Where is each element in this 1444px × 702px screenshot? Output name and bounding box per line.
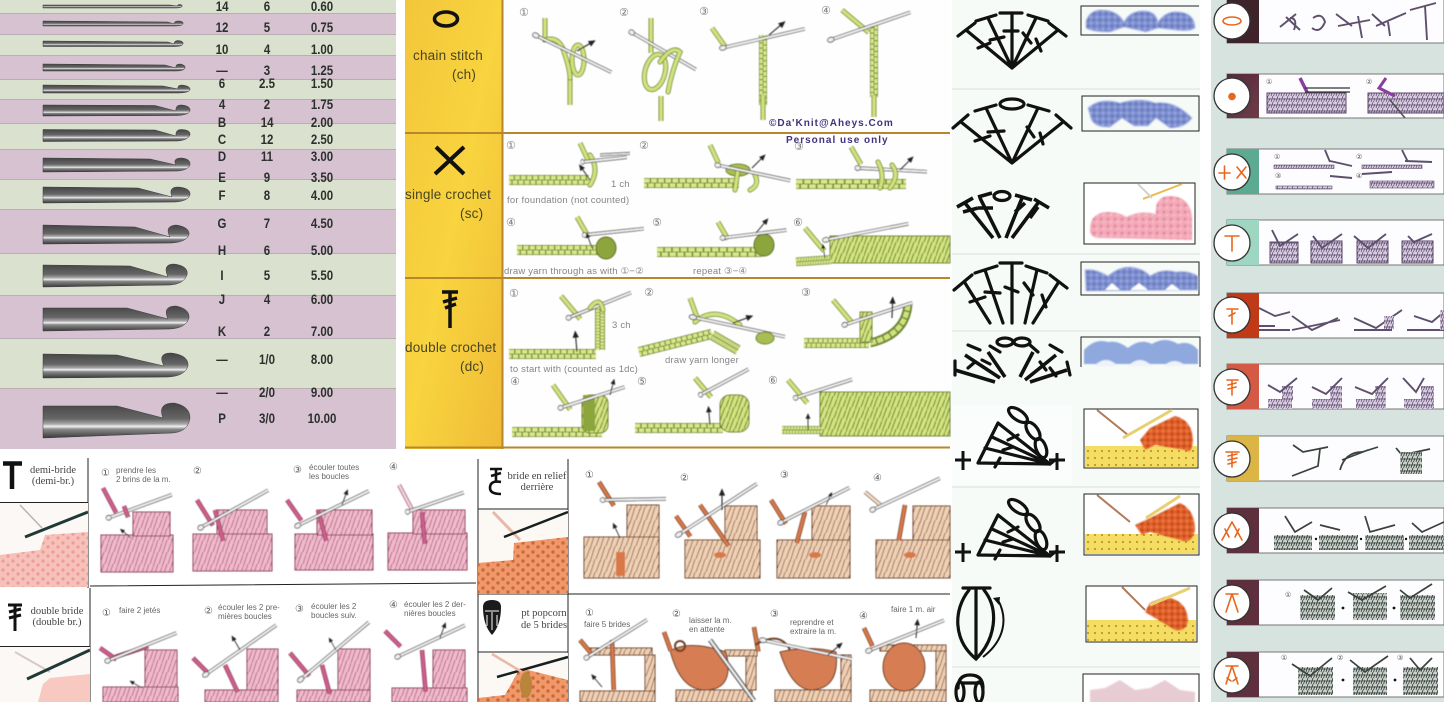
instruction text: ② xyxy=(204,606,213,617)
size table numbers: 12 xyxy=(261,131,273,147)
size table numbers: 1/0 xyxy=(259,351,275,367)
size table numbers: 1.75 xyxy=(311,96,333,112)
size table numbers: H xyxy=(218,242,226,258)
size table numbers: 2.5 xyxy=(259,75,275,91)
swatch: pale pink xyxy=(1083,674,1199,702)
size table numbers: 12 xyxy=(216,19,228,35)
instruction text: faire 2 jetés xyxy=(119,606,160,615)
symbol: fan 3 xyxy=(957,192,1049,238)
size table numbers: 5.00 xyxy=(311,242,333,258)
size table numbers: 3 xyxy=(264,62,270,78)
swatch: blue scallop 1 xyxy=(1081,6,1199,35)
instruction text: ① xyxy=(585,470,594,481)
circled step numbers: ⑥ xyxy=(768,375,778,387)
chain stitch illustrations xyxy=(532,10,911,121)
size table numbers: J xyxy=(219,291,225,307)
single crochet captions: 1 ch xyxy=(611,179,630,190)
size table numbers: 5 xyxy=(264,267,270,283)
strip 5: double crochet xyxy=(1214,293,1444,338)
size table numbers: 2.50 xyxy=(311,131,333,147)
double bride heading: (double br.) xyxy=(32,617,82,628)
size table numbers: 4 xyxy=(219,96,226,112)
watermark xyxy=(769,118,894,146)
circled step numbers: ② xyxy=(644,287,654,299)
circled step numbers: ② xyxy=(639,140,649,152)
double crochet captions: 3 ch xyxy=(612,320,631,331)
strip 2: slip stitch: ② xyxy=(1366,78,1372,86)
instruction text: ④ xyxy=(859,611,868,622)
pink stitch diagrams row 2 xyxy=(100,620,467,702)
single crochet captions: draw yarn through as with ①−② xyxy=(504,266,644,277)
size table numbers: 9.00 xyxy=(311,384,333,400)
instruction text: écouler toutes xyxy=(309,463,359,472)
instruction text: écouler les 2 pre- xyxy=(218,603,280,612)
size table numbers: 3.50 xyxy=(311,169,333,185)
panel: peach stitch instructions xyxy=(476,450,950,702)
photo: peach fabric and hook 1 xyxy=(478,510,568,594)
size table numbers: 10.00 xyxy=(308,410,336,426)
instruction text: laisser la m. xyxy=(689,616,732,625)
single crochet captions: repeat ③−④ xyxy=(693,266,747,277)
size table numbers: 2 xyxy=(264,323,270,339)
swatch: orange 2 xyxy=(1084,494,1199,555)
size table numbers: 6 xyxy=(219,75,225,91)
strip 2: slip stitch: ① xyxy=(1266,78,1272,86)
swatch: orange 1 xyxy=(1084,409,1198,468)
instruction text: extraire la m. xyxy=(790,627,836,636)
instruction text: faire 5 brides xyxy=(584,620,630,629)
instruction text: faire 1 m. air xyxy=(891,605,936,614)
double bride heading xyxy=(31,606,84,628)
demi-bride heading xyxy=(30,465,76,487)
size table numbers: 1.00 xyxy=(311,41,333,57)
instruction text: nières boucles xyxy=(404,609,456,618)
strip 10: cluster variant xyxy=(1214,652,1444,697)
stitch names: (sc) xyxy=(460,206,483,221)
size table numbers: 6.00 xyxy=(311,291,333,307)
watermark: ©Da'Knit@Aheys.Com xyxy=(769,118,894,129)
size table numbers: 14 xyxy=(261,114,274,130)
size table numbers: 7.00 xyxy=(311,323,333,339)
demi-bride heading: demi-bride xyxy=(30,465,76,476)
circled step numbers: ① xyxy=(506,140,516,152)
circled step numbers: ④ xyxy=(506,217,516,229)
size table numbers: 5 xyxy=(264,19,270,35)
icon: chain symbol xyxy=(434,12,458,26)
instruction text: ② xyxy=(193,466,202,477)
instruction text: ① xyxy=(585,608,594,619)
double bride heading: double bride xyxy=(31,606,84,617)
popcorn heading: pt popcorn xyxy=(521,608,567,619)
size table numbers: — xyxy=(216,384,228,400)
size table numbers: 2/0 xyxy=(259,384,275,400)
symbol: fan 5 xyxy=(955,338,1070,382)
size table numbers: 7 xyxy=(264,215,270,231)
instruction text: ③ xyxy=(293,465,302,476)
strip 8: decrease xyxy=(1214,508,1444,553)
stitch names xyxy=(405,48,496,374)
panel: stitch symbol charts and swatches xyxy=(952,0,1200,702)
size table numbers: 4 xyxy=(264,41,271,57)
panel: pink stitch instructions xyxy=(0,450,476,702)
panel: hook size chart xyxy=(0,0,396,449)
strip 3: single crochet: ③ xyxy=(1275,172,1281,180)
icon: single crochet symbol xyxy=(435,147,464,174)
size table numbers: 2.00 xyxy=(311,114,333,130)
size table numbers: 6 xyxy=(264,242,270,258)
double crochet captions: draw yarn longer xyxy=(665,355,739,366)
circled step numbers: ③ xyxy=(699,6,709,18)
strip 3: single crochet: ② xyxy=(1356,153,1362,161)
strip 7: chart foundation xyxy=(1214,436,1444,481)
strip 10: cluster variant: ② xyxy=(1337,654,1343,662)
strip 3: single crochet xyxy=(1214,149,1444,194)
icon: popcorn symbol xyxy=(483,600,501,635)
strip 9: cluster: ① xyxy=(1285,591,1291,599)
strip 9: cluster xyxy=(1214,580,1444,625)
instruction text: les boucles xyxy=(309,472,349,481)
icon: demi-bride symbol xyxy=(3,464,22,489)
strip 1: chain xyxy=(1214,0,1444,43)
stitch names: single crochet xyxy=(405,187,491,202)
demi-bride heading: (demi-br.) xyxy=(32,476,75,487)
photo: pink fabric and hook 1 xyxy=(0,503,88,587)
instruction text: en attente xyxy=(689,625,725,634)
strip 3: single crochet: ④ xyxy=(1356,172,1362,180)
circled step numbers: ③ xyxy=(794,141,804,153)
relief stitch heading xyxy=(508,471,567,493)
instruction text: boucles suiv. xyxy=(311,611,357,620)
size table numbers: E xyxy=(218,169,226,185)
instruction text: ④ xyxy=(389,462,398,473)
circled step numbers: ③ xyxy=(801,287,811,299)
watermark: Personal use only xyxy=(786,135,889,146)
size table numbers: K xyxy=(218,323,227,339)
icon: double bride symbol xyxy=(8,605,22,631)
peach stitch diagrams row 2 xyxy=(580,618,946,702)
instruction text xyxy=(101,462,466,621)
size table numbers: 4.50 xyxy=(311,215,333,231)
size table numbers: 4.00 xyxy=(311,187,333,203)
strip 2: slip stitch xyxy=(1214,74,1444,118)
symbol: fan 2 xyxy=(953,99,1071,163)
instruction text: ② xyxy=(680,473,689,484)
size table numbers: 10 xyxy=(216,41,228,57)
instruction text: 2 brins de la m. xyxy=(116,475,171,484)
stitch names: double crochet xyxy=(405,340,496,355)
strip 3: single crochet: ① xyxy=(1274,153,1280,161)
size table numbers: 9 xyxy=(264,169,270,185)
circled step numbers: ⑤ xyxy=(637,376,647,388)
icon: double crochet symbol xyxy=(442,292,458,328)
size table numbers: P xyxy=(218,410,226,426)
icon: relief stitch symbol xyxy=(490,469,502,494)
panel: basic stitches in green yarn xyxy=(405,0,950,449)
swatch: pink with hook xyxy=(1084,183,1195,244)
size table numbers: 0.75 xyxy=(311,19,333,35)
symbol: bobble with arrow xyxy=(958,588,1003,659)
photo: pink fabric and hook 2 xyxy=(0,647,90,702)
symbol: picot xyxy=(956,675,983,702)
size table numbers: B xyxy=(218,114,226,130)
stitch names: (dc) xyxy=(460,359,484,374)
size table numbers: 2 xyxy=(264,96,270,112)
strip 6: treble xyxy=(1214,364,1444,409)
instruction text: prendre les xyxy=(116,466,156,475)
single crochet captions: for foundation (not counted) xyxy=(507,195,629,206)
strip 10: cluster variant: ① xyxy=(1281,654,1287,662)
size table numbers: I xyxy=(220,267,224,283)
swatch: blue scallop 2 xyxy=(1082,96,1199,131)
circled step numbers: ⑥ xyxy=(793,217,803,229)
size table numbers: 8.00 xyxy=(311,351,333,367)
size table numbers: G xyxy=(218,215,227,231)
symbol: sideways fan 7 xyxy=(955,497,1065,562)
relief stitch heading: derrière xyxy=(521,482,554,493)
instruction text: ① xyxy=(101,468,110,479)
circled step numbers: ① xyxy=(519,7,529,19)
double crochet captions: to start with (counted as 1dc) xyxy=(510,364,638,375)
peach stitch diagrams row 1 xyxy=(584,476,950,578)
symbol: fan 1 xyxy=(958,13,1066,68)
instruction text: ③ xyxy=(295,604,304,615)
size table numbers: 1.25 xyxy=(311,62,333,78)
instruction text: ④ xyxy=(389,600,398,611)
relief stitch heading: bride en relief xyxy=(508,471,567,482)
popcorn heading: de 5 brides xyxy=(521,620,567,631)
instruction text: écouler les 2 der- xyxy=(404,600,466,609)
instruction text: ④ xyxy=(873,473,882,484)
strip 10: cluster variant: ③ xyxy=(1397,654,1403,662)
size table numbers xyxy=(216,0,336,426)
size table numbers: 3.00 xyxy=(311,148,333,164)
size table numbers: 4 xyxy=(264,291,271,307)
circled step numbers: ① xyxy=(509,288,519,300)
circled step numbers: ② xyxy=(619,7,629,19)
size table numbers: D xyxy=(218,148,226,164)
instruction text: ① xyxy=(102,608,111,619)
circled step numbers: ④ xyxy=(821,5,831,17)
double crochet captions xyxy=(510,320,739,375)
swatch: blue scallop 4 xyxy=(1081,337,1200,367)
hook illustrations xyxy=(43,4,190,438)
single crochet captions xyxy=(504,179,747,277)
instruction text: écouler les 2 xyxy=(311,602,357,611)
symbol: fan 4 xyxy=(954,263,1067,323)
size table numbers: 1.50 xyxy=(311,75,333,91)
circled step numbers: ④ xyxy=(510,376,520,388)
size table numbers: 11 xyxy=(261,148,273,164)
popcorn heading xyxy=(521,608,567,631)
double crochet illustrations xyxy=(509,290,950,436)
symbol: sideways fan 6 xyxy=(955,405,1065,470)
instruction text: ② xyxy=(672,609,681,620)
single crochet illustrations xyxy=(509,143,950,264)
circled step numbers: ⑤ xyxy=(652,217,662,229)
stitch names: chain stitch xyxy=(413,48,483,63)
size table numbers: — xyxy=(216,62,228,78)
instruction text: ③ xyxy=(770,609,779,620)
photo: peach fabric and hook 2 xyxy=(478,653,568,702)
circled step numbers xyxy=(506,5,831,388)
size table numbers: 5.50 xyxy=(311,267,333,283)
instruction text: reprendre et xyxy=(790,618,834,627)
instruction text: mières boucles xyxy=(218,612,272,621)
size table numbers: F xyxy=(219,187,226,203)
size table numbers: 3/0 xyxy=(259,410,275,426)
instruction text xyxy=(584,470,936,636)
panel: stitch strips xyxy=(1211,0,1444,702)
swatch: blue scallop 3 xyxy=(1081,262,1199,295)
instruction text: ③ xyxy=(780,470,789,481)
size table numbers: C xyxy=(218,131,226,147)
size table numbers: — xyxy=(216,351,228,367)
pink stitch diagrams row 1 xyxy=(101,485,467,572)
strip 4: half double xyxy=(1214,220,1444,265)
size table numbers: 8 xyxy=(264,187,270,203)
swatch: orange 3 xyxy=(1086,586,1197,642)
stitch names: (ch) xyxy=(452,67,476,82)
